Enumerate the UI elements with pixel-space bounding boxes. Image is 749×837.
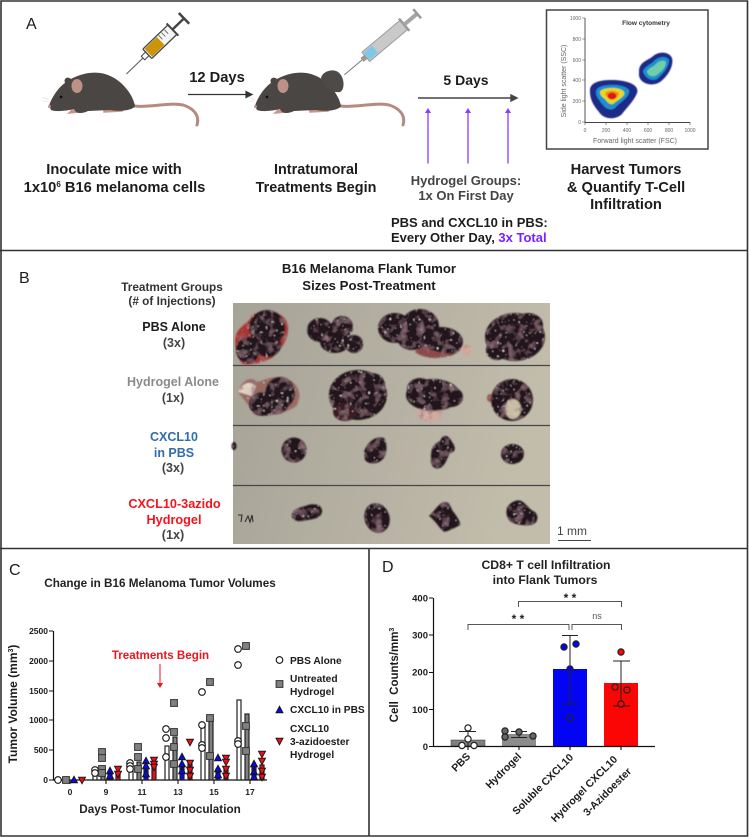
text: PBS schedule: PBS and CXCL10 in PBS: bbox=[391, 215, 548, 230]
y axis title: Cell Counts/mm bbox=[389, 632, 401, 722]
photo: excised tumors bbox=[232, 303, 550, 544]
text: harvest tumors bbox=[567, 162, 685, 213]
annotation: treatments begin: Treatments Begin bbox=[112, 649, 209, 662]
x tick labels: 13 bbox=[173, 787, 183, 797]
y axis: 1000 bbox=[29, 715, 48, 725]
data points: CXCL10 3-azidoester hydrogel bbox=[78, 739, 266, 784]
text: inoculate mice bbox=[24, 162, 205, 196]
x tick labels bbox=[68, 787, 255, 797]
title: CD8+ T cell infiltration: into Flank Tumors bbox=[493, 573, 598, 587]
y axis: 2000 bbox=[29, 656, 48, 666]
title: CD8+ T cell infiltration: CD8+ T cell Infiltration bbox=[481, 558, 611, 572]
title: tumor sizes: Sizes Post-Treatment bbox=[302, 278, 436, 293]
axes: 300 bbox=[412, 630, 428, 642]
flow cytometry plot: 600 bbox=[573, 58, 581, 64]
text: inoculate mice: Inoculate mice with bbox=[46, 162, 182, 178]
title: tumor volumes: Change in B16 Melanoma Tumor Volumes bbox=[44, 577, 276, 590]
text: intratumoral treatments begin: Intratumoral bbox=[274, 162, 358, 178]
x axis title: Days Post-Tumor Inoculation bbox=[79, 803, 241, 816]
flow cytometry plot: 800 bbox=[573, 37, 581, 43]
bars bbox=[451, 669, 638, 746]
axes: 100 bbox=[412, 705, 428, 716]
text: harvest tumors: Infiltration bbox=[590, 197, 662, 213]
annotation: treatments begin bbox=[112, 649, 209, 688]
significance brackets: * * bbox=[564, 591, 577, 605]
arrow: 12 days bbox=[188, 92, 252, 98]
flow cytometry plot: 0 bbox=[584, 128, 587, 134]
x tick labels: PBS bbox=[449, 751, 473, 774]
flow cytometry plot: 400 bbox=[573, 78, 581, 84]
panel letter D: D bbox=[382, 559, 394, 576]
panel letter A: A bbox=[26, 16, 37, 33]
legend bbox=[276, 656, 365, 761]
flow cytometry plot: 800 bbox=[665, 128, 673, 134]
label: CXCL10-3azido hydrogel: CXCL10-3azido bbox=[128, 497, 221, 511]
axes bbox=[412, 594, 655, 753]
y axis: 2500 bbox=[29, 626, 48, 636]
label: PBS alone: (3x) bbox=[163, 336, 185, 350]
y axis: 0 bbox=[43, 775, 48, 785]
legend: Hydrogel bbox=[290, 750, 334, 761]
title: tumor sizes: B16 Melanoma Flank Tumor bbox=[282, 261, 456, 276]
legend: CXCL10 in PBS bbox=[290, 705, 365, 716]
arrow: 5 days bbox=[418, 95, 517, 101]
y axis bbox=[29, 626, 267, 785]
label: PBS alone bbox=[142, 320, 206, 350]
icon: blue syringe bbox=[339, 8, 422, 81]
icon: mouse one bbox=[42, 73, 198, 125]
row 1 tumors bbox=[235, 309, 545, 365]
data points: PBS alone bbox=[55, 646, 241, 783]
data points: untreated hydrogel bbox=[63, 643, 249, 783]
label: 5 days: 5 Days bbox=[443, 72, 489, 88]
scale bar: 1 mm: 1 mm bbox=[557, 524, 587, 538]
text: harvest tumors: & Quantify T-Cell bbox=[567, 180, 685, 196]
y axis title: 3 bbox=[389, 628, 396, 632]
y axis: 500 bbox=[34, 745, 48, 755]
panel: D bbox=[382, 558, 655, 825]
text: hydrogel groups bbox=[411, 173, 521, 203]
text: treatment groups heading: (# of Injections) bbox=[128, 294, 216, 308]
text: PBS schedule bbox=[391, 215, 548, 245]
text: inoculate mice: 1x10 bbox=[24, 180, 56, 196]
label: hydrogel alone: Hydrogel Alone bbox=[127, 375, 219, 389]
text: hydrogel groups: 1x On First Day bbox=[418, 188, 514, 203]
flow cytometry plot: Side light scatter (SSC) bbox=[561, 45, 568, 117]
label: CXCL10-3azido hydrogel: Hydrogel bbox=[146, 513, 202, 527]
x tick labels: Hydrogel bbox=[483, 751, 524, 791]
flow cytometry plot: 600 bbox=[644, 128, 652, 134]
flow cytometry plot: 200 bbox=[602, 128, 610, 134]
row 2 tumors bbox=[238, 370, 533, 422]
y axis title: ) bbox=[6, 645, 20, 649]
row 3 tumors bbox=[232, 436, 524, 468]
text: intratumoral treatments begin: Treatments Begin bbox=[256, 180, 376, 196]
x tick labels: Soluble CXCL10 bbox=[510, 752, 576, 817]
icon: yellow syringe bbox=[121, 12, 190, 80]
label: hydrogel alone bbox=[127, 375, 219, 405]
label: CXCL10 in PBS bbox=[150, 430, 198, 475]
legend: Untreated bbox=[290, 674, 338, 685]
label: CXCL10-3azido hydrogel bbox=[128, 497, 221, 542]
text: inoculate mice: 6 bbox=[56, 180, 61, 189]
label: CXCL10 in PBS: CXCL10 bbox=[150, 430, 198, 444]
significance brackets: * * bbox=[512, 612, 525, 626]
significance brackets: ns bbox=[592, 611, 602, 621]
text: inoculate mice: B16 melanoma cells bbox=[61, 180, 205, 196]
title: tumor sizes bbox=[282, 261, 456, 293]
legend: CXCL10 bbox=[290, 724, 329, 735]
panel letter C: C bbox=[9, 562, 21, 579]
bars bbox=[93, 700, 264, 780]
flow cytometry plot: 200 bbox=[573, 99, 581, 105]
x tick labels: 11 bbox=[138, 787, 147, 797]
error bars bbox=[459, 635, 630, 746]
axes: 400 bbox=[412, 594, 428, 604]
title: CD8+ T cell infiltration bbox=[481, 558, 611, 587]
y axis title: Tumor Volume (mm bbox=[6, 652, 20, 763]
legend: 3-azidoester bbox=[290, 737, 349, 748]
y axis title: 3 bbox=[8, 648, 15, 652]
axes: 0 bbox=[423, 742, 428, 753]
chart: tumor volume bbox=[6, 626, 267, 816]
significance brackets bbox=[468, 591, 622, 630]
row 4 tumors bbox=[292, 500, 537, 536]
flow cytometry plot: 400 bbox=[623, 128, 631, 134]
panel: A bbox=[24, 8, 708, 245]
label: 12 days: 12 Days bbox=[189, 70, 245, 86]
flow cytometry plot bbox=[546, 10, 708, 149]
x tick labels bbox=[449, 751, 634, 825]
panel: C bbox=[6, 562, 365, 816]
text: hydrogel groups: Hydrogel Groups: bbox=[411, 173, 521, 188]
panel: B bbox=[19, 261, 591, 544]
flow cytometry plot: 1000 bbox=[684, 128, 696, 134]
x tick labels: 9 bbox=[104, 787, 109, 797]
label: PBS alone: PBS Alone bbox=[142, 320, 206, 334]
y axis: 1500 bbox=[29, 686, 48, 696]
x tick labels: 3-Azidoester bbox=[581, 766, 634, 819]
data points bbox=[459, 641, 630, 749]
flow cytometry plot: Forward light scatter (FSC) bbox=[593, 138, 677, 145]
text: harvest tumors: Harvest Tumors bbox=[571, 162, 681, 178]
label: hydrogel alone: (1x) bbox=[162, 391, 184, 405]
arrows: purple injection times bbox=[425, 108, 511, 164]
x tick labels: Hydrogel CXCL10 bbox=[549, 754, 620, 825]
flow cytometry plot: Flow cytometry bbox=[622, 20, 670, 27]
icon: mouse two with tumor bbox=[248, 70, 404, 125]
panel letter B: B bbox=[19, 270, 30, 287]
text: intratumoral treatments begin bbox=[256, 162, 376, 196]
text: treatment groups heading bbox=[121, 280, 223, 308]
legend: Hydrogel bbox=[290, 687, 334, 698]
flow cytometry plot: 1000 bbox=[570, 16, 581, 22]
data points: CXCL10 in PBS bbox=[70, 753, 258, 783]
x tick labels: 15 bbox=[209, 787, 219, 797]
text: PBS schedule: Every Other Day, 3x Total bbox=[391, 230, 547, 245]
label: CXCL10-3azido hydrogel: (1x) bbox=[162, 528, 184, 542]
x tick labels: 17 bbox=[245, 787, 255, 797]
axes: 200 bbox=[412, 668, 428, 678]
label: CXCL10 in PBS: in PBS bbox=[154, 446, 194, 460]
text: treatment groups heading: Treatment Groups bbox=[121, 280, 223, 294]
legend: PBS Alone bbox=[290, 656, 342, 667]
chart: T cell counts bbox=[389, 591, 655, 825]
flow cytometry plot: 0 bbox=[578, 120, 581, 126]
x tick labels: 0 bbox=[68, 787, 73, 797]
label: CXCL10 in PBS: (3x) bbox=[162, 461, 184, 475]
